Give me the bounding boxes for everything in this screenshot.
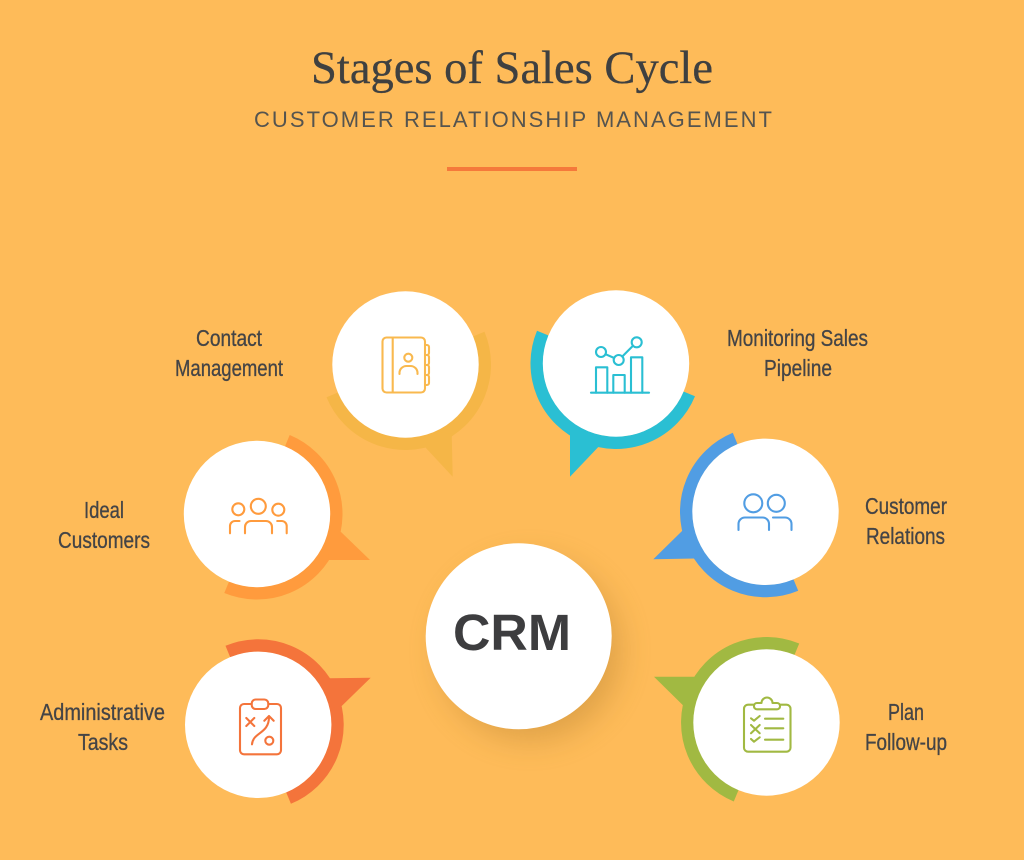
label: Contact Management: Contact bbox=[196, 325, 263, 351]
icon: three people bbox=[230, 499, 287, 533]
label: Plan Follow-up: Follow-up bbox=[865, 729, 947, 755]
label: Plan Follow-up: Plan bbox=[888, 699, 924, 725]
node: Plan Follow-up bbox=[654, 643, 947, 796]
white circle: ideal customers bbox=[184, 441, 330, 587]
white circle: administrative tasks bbox=[185, 652, 331, 798]
ring and pointer: monitoring bbox=[537, 333, 689, 477]
hub circle bbox=[426, 543, 612, 729]
label: Administrative Tasks bbox=[40, 699, 165, 755]
label: Ideal Customers: Customers bbox=[58, 527, 150, 553]
node: Contact Management bbox=[175, 291, 485, 477]
ring and pointer: contact bbox=[332, 334, 485, 477]
ring and pointer: ideal customers bbox=[227, 441, 370, 593]
icon: checklist clipboard bbox=[744, 698, 790, 752]
node: Monitoring Sales Pipeline bbox=[537, 290, 868, 477]
icon: bar chart with trend bbox=[591, 337, 649, 393]
hub shadow bbox=[440, 560, 620, 740]
title underline bbox=[447, 167, 577, 171]
white circle: plan follow-up bbox=[693, 649, 840, 796]
ring and pointer: customer relations bbox=[653, 439, 796, 591]
label: Monitoring Sales Pipeline: Pipeline bbox=[764, 355, 832, 381]
label: Administrative Tasks: Administrative bbox=[40, 699, 165, 725]
icon: two people bbox=[738, 494, 792, 530]
node: Administrative Tasks bbox=[40, 646, 371, 798]
label: Ideal Customers: Ideal bbox=[84, 497, 124, 523]
subtitle: CUSTOMER RELATIONSHIP MANAGEMENT bbox=[254, 107, 772, 132]
label: Administrative Tasks: Tasks bbox=[78, 729, 128, 755]
hub label: CRM bbox=[453, 604, 571, 661]
title: Stages of Sales Cycle bbox=[311, 42, 713, 94]
white circle: customer relations bbox=[692, 439, 839, 585]
label: Contact Management bbox=[175, 325, 283, 381]
icon: address book bbox=[382, 338, 429, 392]
central CRM hub bbox=[426, 543, 620, 740]
label: Ideal Customers bbox=[58, 497, 150, 553]
label: Customer Relations bbox=[865, 493, 947, 549]
label: Plan Follow-up bbox=[865, 699, 947, 755]
label: Monitoring Sales Pipeline: Monitoring Sales bbox=[727, 325, 868, 351]
white circle: contact bbox=[332, 291, 479, 438]
node: Ideal Customers bbox=[58, 441, 370, 593]
label: Monitoring Sales Pipeline bbox=[727, 325, 868, 381]
icon: strategy clipboard bbox=[240, 700, 281, 754]
white circle: monitoring bbox=[543, 290, 689, 437]
ring and pointer: administrative tasks bbox=[228, 646, 371, 798]
ring and pointer: plan follow-up bbox=[654, 643, 797, 796]
label: Contact Management: Management bbox=[175, 355, 283, 381]
node: Customer Relations bbox=[653, 439, 947, 591]
label: Customer Relations: Relations bbox=[866, 523, 945, 549]
label: Customer Relations: Customer bbox=[865, 493, 947, 519]
